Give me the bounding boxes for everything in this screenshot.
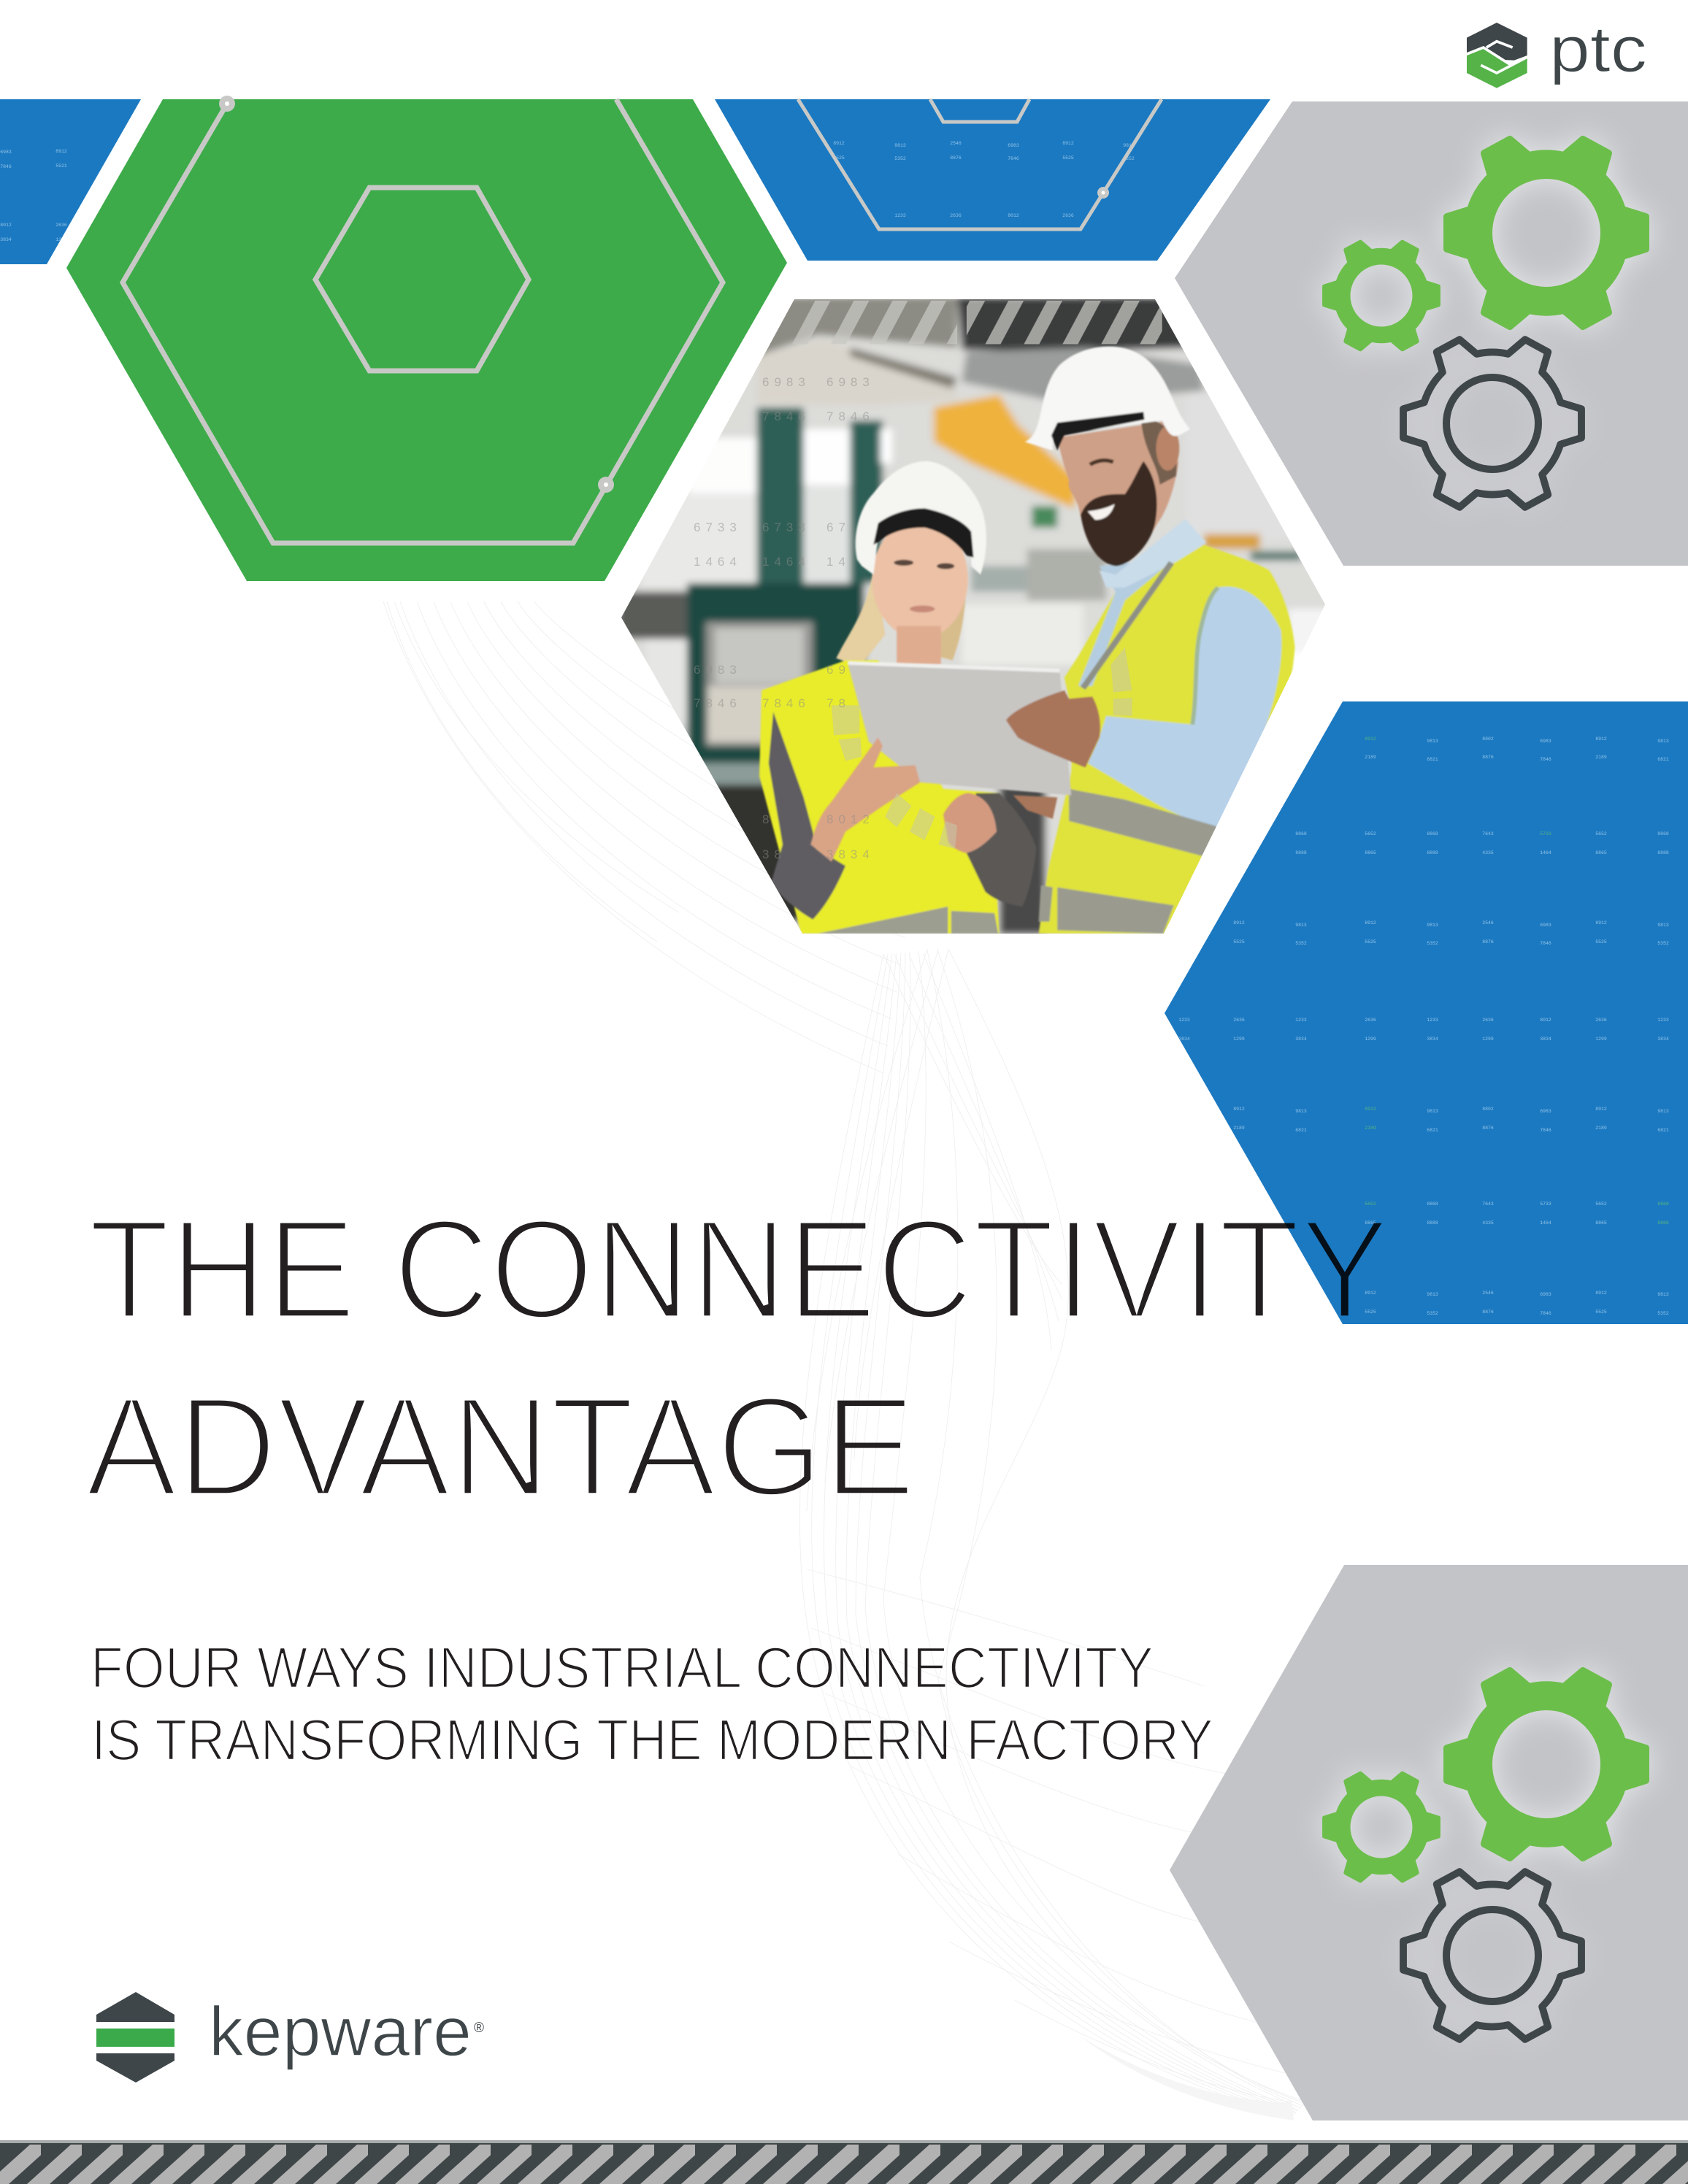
grey hexagon with gears top right	[1175, 101, 1688, 566]
data digits right: 8876	[1482, 1310, 1494, 1315]
data digits right: 8888	[1427, 850, 1438, 855]
photo overlay digits: 7846	[826, 410, 875, 423]
data digits right: 8888	[1657, 850, 1669, 855]
subtitle: FOUR WAYS INDUSTRIAL CONNECTIVITY	[91, 1635, 1154, 1700]
data digits right: 5652	[1595, 831, 1607, 837]
photo overlay digits: 6733	[762, 520, 810, 534]
data digits right: 8868	[1427, 1201, 1438, 1207]
icon: dark outline gear	[1403, 1872, 1581, 2039]
gears glow	[1324, 1671, 1646, 2039]
data digits right: 5733	[1540, 831, 1551, 837]
data digits right: 6821	[1427, 1128, 1438, 1133]
data digits top left: 8012	[0, 223, 12, 228]
hazard stripe band	[0, 2140, 1688, 2184]
data digits right: 8912	[1365, 1291, 1376, 1296]
data digits right: 5525	[1233, 939, 1245, 945]
data digits top centre: 5525	[833, 155, 845, 161]
data digits top centre: 9813	[894, 143, 906, 148]
data digits right: 1299	[1365, 1037, 1376, 1042]
data digits right: 4335	[1482, 1220, 1494, 1226]
data digits right: 8868	[1295, 831, 1307, 837]
translucent gauge blocks	[832, 647, 1132, 849]
data digits top centre: 3834	[1008, 227, 1019, 232]
circuit outlines top centre	[798, 99, 1162, 229]
tablet and hands	[810, 663, 1100, 861]
data digits right: 1464	[1540, 1220, 1551, 1226]
data digits top centre: 1299	[1062, 227, 1074, 232]
data digits right: 8888	[1657, 1220, 1669, 1226]
photo overlay digits: 69	[826, 663, 851, 677]
photo overlay digits: 7846	[694, 696, 742, 710]
data digits top left: 5521	[55, 164, 67, 169]
data digits right: 5352	[1427, 941, 1438, 946]
data digits right: 1464	[1540, 850, 1551, 855]
data digits right: 3834	[1427, 1037, 1438, 1042]
data digits top left: 8912	[55, 149, 67, 154]
data digits right: 2546	[1482, 920, 1494, 926]
photo overlay digits: 67	[826, 520, 851, 534]
node dot	[1097, 187, 1109, 199]
photo overlay digits: 14	[826, 555, 851, 569]
data digits right: 5652	[1595, 1201, 1607, 1207]
icon: dark outline gear	[1403, 339, 1581, 507]
data digits right: 9813	[1657, 739, 1669, 744]
kepware wordmark: kepware	[209, 1993, 472, 2071]
data digits right: 9813	[1295, 1109, 1307, 1114]
data digits right: 9813	[1657, 1292, 1669, 1297]
data digits right: 1299	[1233, 1037, 1245, 1042]
background wave mesh	[383, 601, 1307, 2117]
data digits right: 6821	[1657, 1128, 1669, 1133]
data digits right: 6821	[1295, 1128, 1307, 1133]
data digits right: 8888	[1427, 1220, 1438, 1226]
subtitle	[91, 1635, 1213, 1772]
data digits right	[1178, 737, 1669, 1316]
data digits right: 8865	[1595, 850, 1607, 855]
data digits right: 9813	[1427, 1109, 1438, 1114]
data digits right: 2189	[1233, 1126, 1245, 1131]
data digits right: 6983	[1540, 923, 1551, 928]
data digits right: 2636	[1595, 1018, 1607, 1023]
data digits right: 3834	[1178, 1037, 1190, 1042]
data digits right: 8912	[1595, 920, 1607, 926]
data digits right: 8912	[1595, 1107, 1607, 1112]
data digits right: 5352	[1657, 1311, 1669, 1316]
data digits right: 8912	[1595, 737, 1607, 742]
man	[1025, 347, 1295, 934]
title	[85, 1190, 1389, 1526]
icon: ptc hexagon	[1465, 23, 1528, 88]
icon: large green gear	[1447, 139, 1646, 326]
data digits right: 8802	[1482, 737, 1494, 742]
factory background	[599, 292, 1343, 943]
data digits right: 4335	[1482, 850, 1494, 855]
data digits right: 5352	[1657, 941, 1669, 946]
outer circuit outline	[123, 99, 723, 543]
data digits top centre: 8012	[1008, 213, 1019, 218]
data digits right: 1233	[1295, 1018, 1307, 1023]
data digits right: 8876	[1482, 939, 1494, 945]
data digits right: 1299	[1595, 1037, 1607, 1042]
data digits right: 8912	[1365, 737, 1376, 742]
data digits right: 2636	[1365, 1018, 1376, 1023]
data digits right: 7643	[1482, 831, 1494, 837]
data digits right: 6821	[1657, 757, 1669, 762]
data digits right: 8888	[1295, 850, 1307, 855]
data digits right: 2189	[1595, 755, 1607, 760]
data digits top left: 3834	[0, 237, 12, 242]
photo overlay digits: 1464	[762, 555, 810, 569]
photo overlay digits: 78	[826, 696, 851, 710]
data digits top centre: 5525	[1062, 155, 1074, 161]
subtitle: IS TRANSFORMING THE MODERN FACTORY	[91, 1707, 1213, 1772]
data digits right: 2189	[1365, 755, 1376, 760]
data digits right: 8865	[1595, 1220, 1607, 1226]
green hexagon	[66, 96, 787, 581]
ptc logo	[1465, 12, 1647, 88]
data digits right: 8868	[1657, 1201, 1669, 1207]
data digits right: 8912	[1233, 1107, 1245, 1112]
photo overlay digits: 1464	[694, 555, 742, 569]
photo overlay digits: 8	[762, 812, 774, 826]
data digits right: 8912	[1595, 1291, 1607, 1296]
grey hexagon with gears bottom right	[1170, 1565, 1688, 2120]
data digits right: 9813	[1295, 923, 1307, 928]
data digits right: 1233	[1427, 1018, 1438, 1023]
data digits right: 3834	[1295, 1037, 1307, 1042]
photo overlay digits: 38	[762, 847, 786, 861]
data digits top left: 7846	[0, 164, 12, 169]
data digits right: 8012	[1540, 1018, 1551, 1023]
title: ADVANTAGE	[85, 1367, 916, 1526]
data digits top left	[0, 149, 67, 242]
data digits right: 2546	[1482, 1291, 1494, 1296]
data digits right: 7643	[1482, 1201, 1494, 1207]
data digits right: 1233	[1657, 1018, 1669, 1023]
data digits right: 5652	[1365, 831, 1376, 837]
blue hexagon top left	[0, 99, 141, 264]
data digits top centre: 1299	[950, 227, 962, 232]
icon: small green gear	[1324, 242, 1438, 349]
data digits right: 8868	[1657, 831, 1669, 837]
icon: small green gear	[1324, 1774, 1438, 1880]
photo overlay digits: 8012	[826, 812, 875, 826]
data digits right: 8876	[1482, 1126, 1494, 1131]
data digits right: 7846	[1540, 941, 1551, 946]
data digits top centre: 9813	[1123, 143, 1135, 148]
data digits right: 8865	[1365, 1220, 1376, 1226]
data digits top centre: 1233	[894, 213, 906, 218]
gears glow	[1324, 139, 1646, 507]
data digits right: 1299	[1482, 1037, 1494, 1042]
data digits right: 7846	[1540, 1128, 1551, 1133]
registered mark: ®	[474, 2020, 484, 2036]
data digits top centre: 7846	[1008, 156, 1019, 161]
data digits right: 2636	[1233, 1018, 1245, 1023]
data digits right: 2636	[1482, 1018, 1494, 1023]
woman	[759, 461, 1037, 934]
data digits top left: 6983	[0, 150, 12, 155]
data digits right: 9813	[1427, 923, 1438, 928]
ptc wordmark: ptc	[1549, 12, 1647, 85]
data digits top centre: 2636	[1062, 213, 1074, 218]
photo overlay digits: 7846	[762, 696, 810, 710]
photo overlay digits: 6733	[694, 520, 742, 534]
data digits right: 1233	[1178, 1018, 1190, 1023]
hazard stripes overlay	[785, 301, 1162, 345]
data digits right: 8802	[1482, 1107, 1494, 1112]
data digits right: 9813	[1657, 923, 1669, 928]
data digits top centre: 6983	[1008, 143, 1019, 148]
title: THE CONNECTIVITY	[88, 1190, 1389, 1349]
data digits right: 7846	[1540, 757, 1551, 762]
icon: kepware hexagon	[96, 1992, 174, 2083]
data digits right: 8912	[1365, 920, 1376, 926]
data digits right: 5733	[1540, 1201, 1551, 1207]
data digits top centre: 2546	[950, 141, 962, 146]
data digits right: 8868	[1427, 831, 1438, 837]
data digits right: 5352	[1295, 941, 1307, 946]
data digits right: 8912	[1365, 1107, 1376, 1112]
data digits right: 5352	[1427, 1311, 1438, 1316]
photo overlay digits	[694, 375, 875, 861]
data digits top centre: 8876	[950, 155, 962, 161]
data digits right: 8876	[1482, 755, 1494, 760]
data digits top centre: 5352	[1123, 156, 1135, 161]
data digits right: 6983	[1540, 1292, 1551, 1297]
data digits right: 5652	[1365, 1201, 1376, 1207]
data digits top centre: 5352	[894, 156, 906, 161]
icon: large green gear	[1447, 1671, 1646, 1858]
photo overlay digits: 6983	[826, 375, 875, 389]
data digits right: 5525	[1595, 939, 1607, 945]
photo overlay digits: 3834	[826, 847, 875, 861]
blue hexagon right	[1165, 701, 1688, 1324]
data digits right: 3834	[1657, 1037, 1669, 1042]
blue hexagon top centre	[715, 99, 1270, 261]
photo overlay digits: 7846	[762, 410, 810, 423]
data digits top left: 1299	[55, 237, 67, 242]
data digits right: 2189	[1595, 1126, 1607, 1131]
data digits right: 9813	[1427, 1292, 1438, 1297]
data digits right: 8912	[1233, 920, 1245, 926]
data digits right: 6983	[1540, 739, 1551, 744]
kepware logo	[96, 1992, 484, 2083]
data digits top centre: 3834	[894, 227, 906, 232]
data digits right: 9813	[1427, 739, 1438, 744]
data digits right: 6821	[1427, 757, 1438, 762]
data digits right: 3834	[1540, 1037, 1551, 1042]
data digits right: 5525	[1365, 1310, 1376, 1315]
mesh tail highlight	[1081, 2037, 1294, 2120]
data digits right: 5525	[1365, 939, 1376, 945]
circuit node dots	[219, 96, 614, 493]
photo: two engineers with a tablet	[599, 292, 1343, 943]
photo overlay digits: 6983	[762, 375, 810, 389]
photo overlay digits: 6983	[694, 663, 742, 677]
data digits top left: 2636	[55, 223, 67, 228]
data digits right: 9813	[1657, 1109, 1669, 1114]
data digits right: 8865	[1365, 850, 1376, 855]
data digits top centre: 2636	[950, 213, 962, 218]
data digits right: 2189	[1365, 1126, 1376, 1131]
data digits top centre: 8912	[833, 141, 845, 146]
data digits right: 5525	[1595, 1310, 1607, 1315]
data digits right: 7846	[1540, 1311, 1551, 1316]
data digits right: 6983	[1540, 1109, 1551, 1114]
data digits top centre: 8912	[1062, 141, 1074, 146]
inner hexagon outline	[315, 188, 529, 371]
data digits top centre	[834, 142, 1135, 217]
